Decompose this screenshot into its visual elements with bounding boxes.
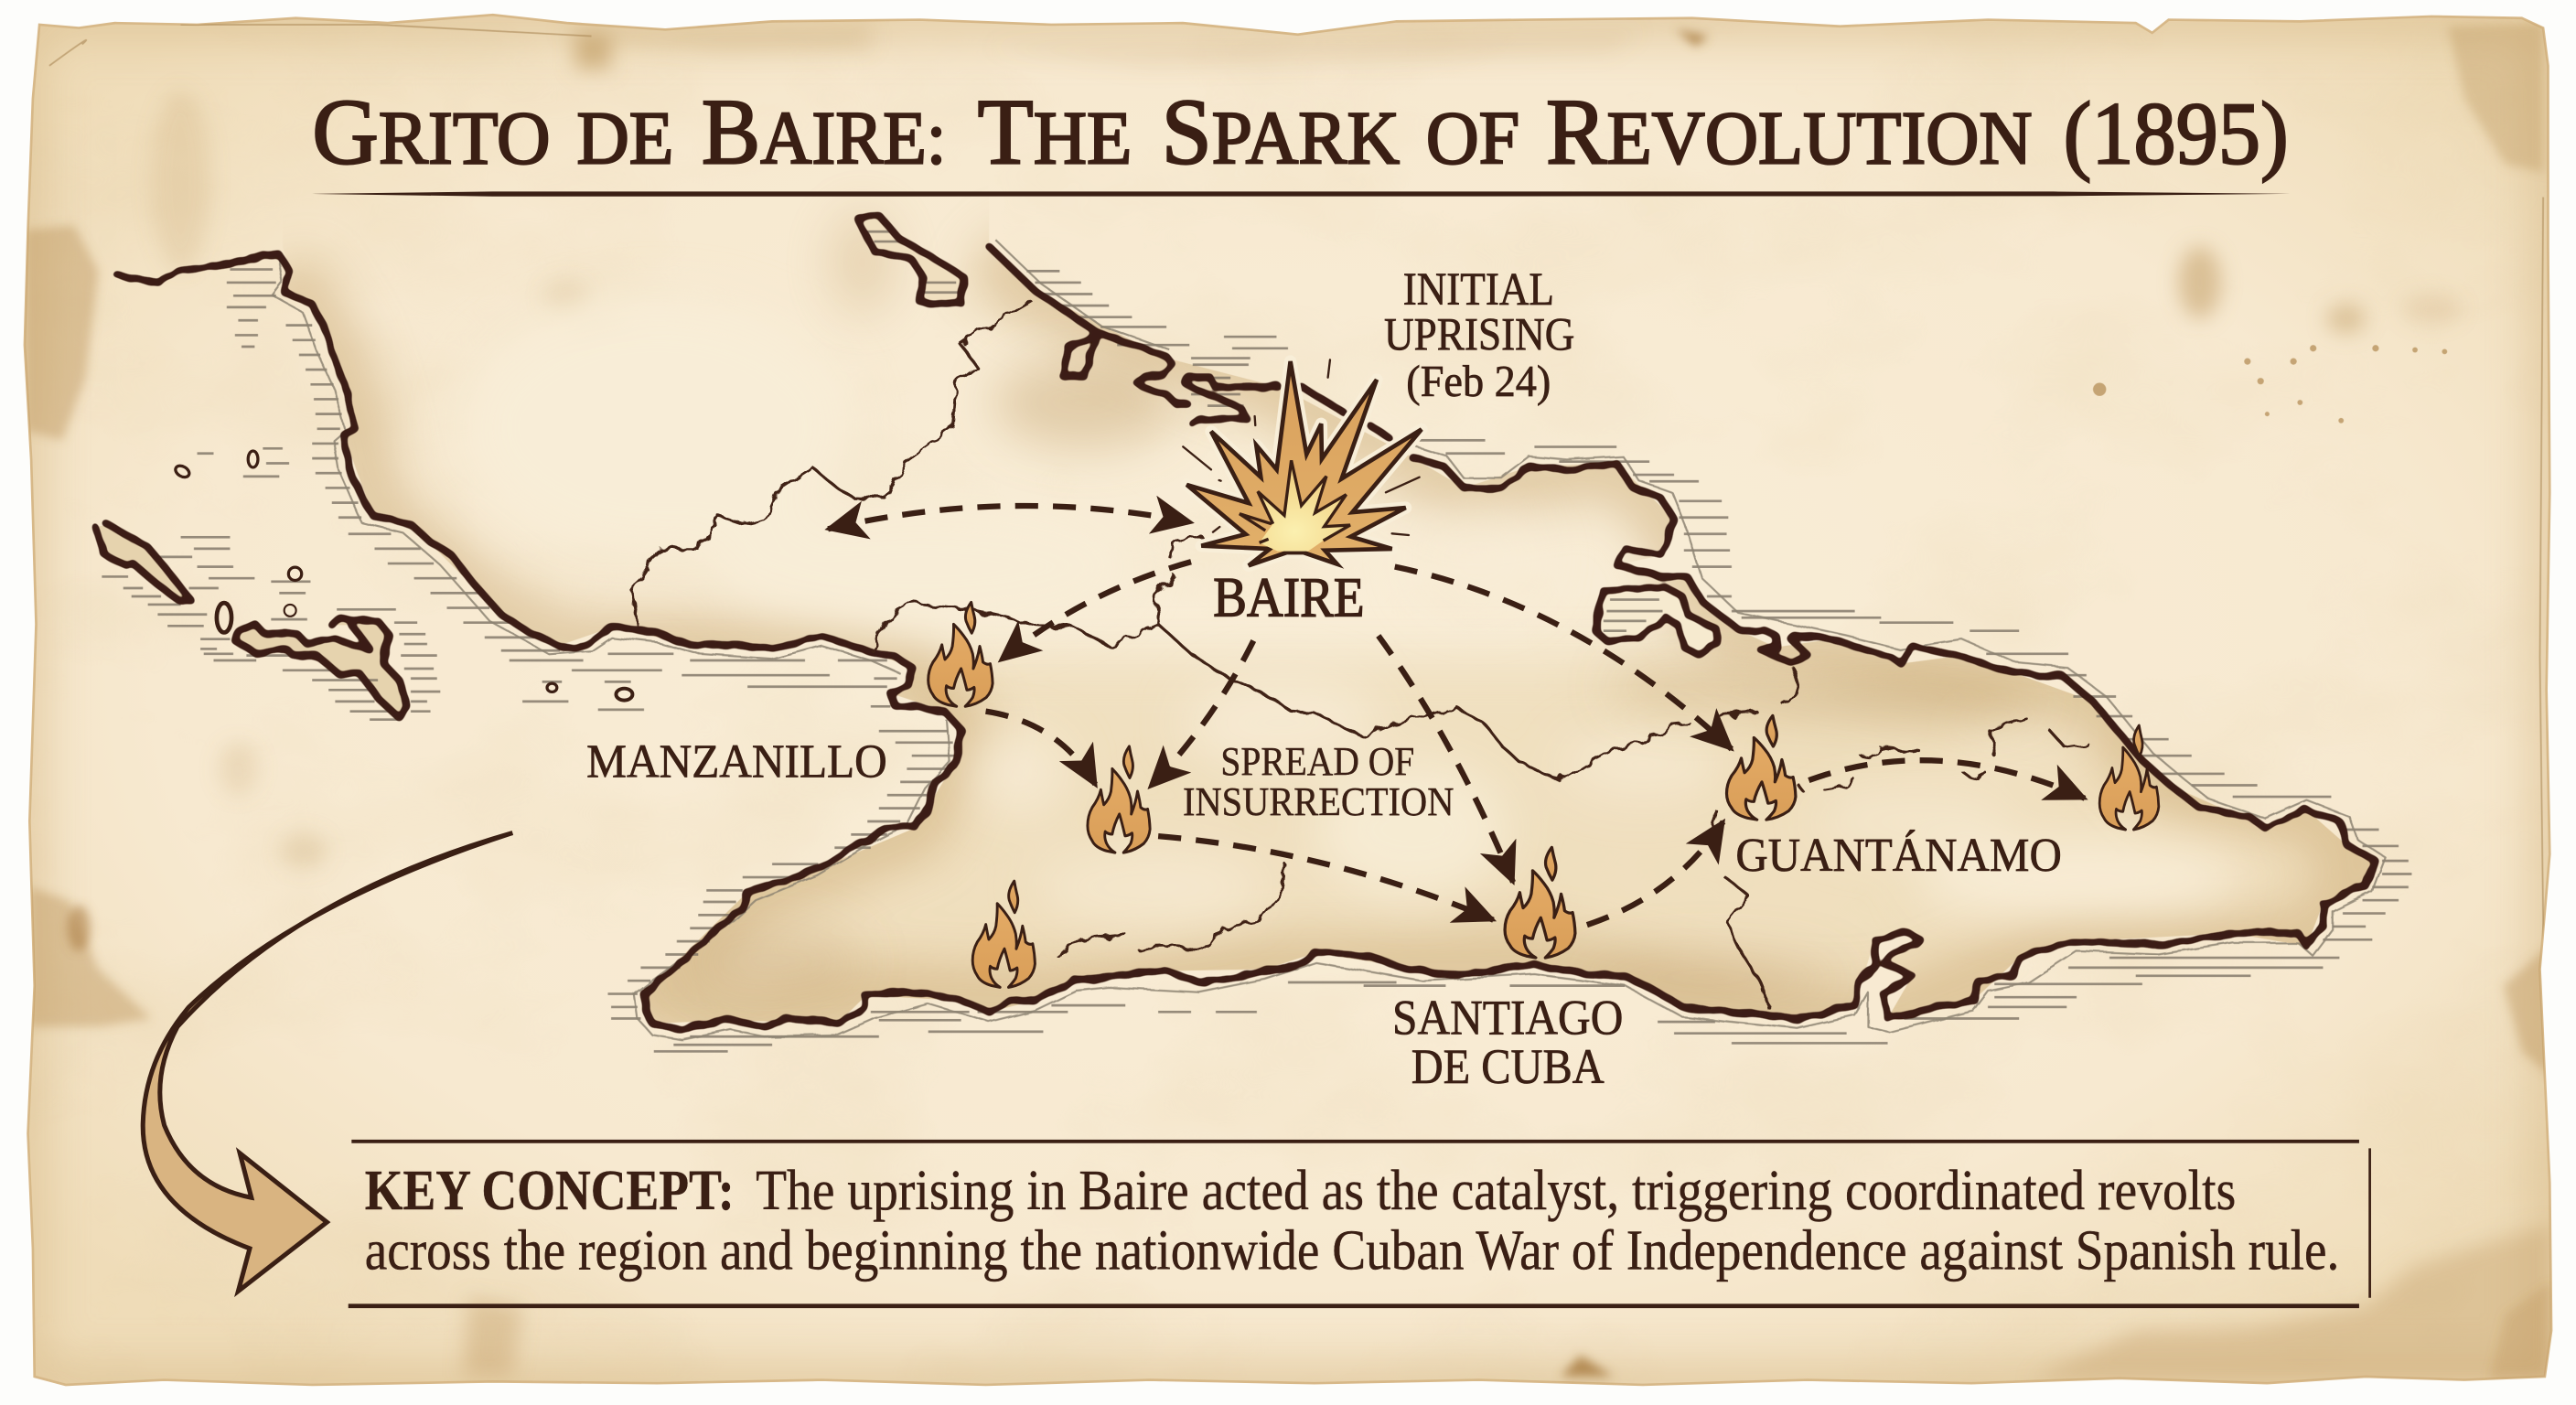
northern peninsula (857, 215, 964, 304)
map: offset grey shorelines (273, 240, 2386, 1040)
label: Santiago de Cuba: DE CUBA (1411, 1039, 1605, 1094)
map: peninsula, lagoon and island fills (95, 210, 1717, 718)
arrow: Guantanamo to east (1809, 760, 2085, 799)
arrow: Baire to Guantanamo (1395, 567, 1732, 749)
heading: title: (1895) (2064, 85, 2289, 183)
icon: explosion at Baire (1183, 359, 1422, 565)
icon: flame near Manzanillo (928, 602, 993, 706)
spatter (2093, 345, 2447, 424)
map: land washes (283, 246, 2431, 1051)
label: initial uprising: (Feb 24) (1406, 358, 1551, 406)
bay (1597, 586, 1717, 656)
heading: title: GRITO (312, 81, 553, 185)
heading: title: SPARK (1162, 81, 1406, 185)
icon: flame east (2099, 725, 2159, 830)
heading: title: THE (978, 81, 1134, 185)
icon: flame Guantanamo (1727, 715, 1796, 820)
arrow: Manzanillo to central fire (986, 712, 1096, 785)
map: small islands (174, 451, 632, 701)
map: rivers (632, 301, 2088, 1007)
key concept text: across the region and beginning the nationwide Cuban War of Independence against Spanish rule. (365, 1218, 2339, 1282)
western islands (95, 524, 190, 601)
panel: key concept (349, 1142, 2370, 1306)
icon: flame south-west (972, 881, 1035, 987)
heading: title: OF (1426, 96, 1519, 180)
label: Manzanillo: MANZANILLO (586, 735, 887, 788)
north coast (989, 246, 1187, 404)
arrow: Baire to Santiago (1379, 636, 1513, 882)
heading: title: BAIRE: (702, 81, 958, 185)
label: Guantanamo: GUANTÁNAMO (1735, 829, 2062, 882)
arrow: central fire to Santiago (1158, 836, 1493, 920)
map: coastlines (95, 215, 2376, 1030)
key concept text: The uprising in Baire acted as the catalyst, triggering coordinated revolts (756, 1158, 2236, 1222)
arrow: double-headed east-west spread (828, 506, 1191, 529)
label: spread of insurrection: SPREAD OF (1220, 738, 1414, 784)
torn-edge lines (48, 24, 2545, 937)
icon: flame Santiago de Cuba (1505, 847, 1575, 958)
main coast (115, 254, 2376, 1030)
label: Baire: BAIRE (1213, 567, 1365, 628)
label: initial uprising: UPRISING (1384, 309, 1574, 360)
icon: flame central (1088, 746, 1150, 853)
arrow: Baire to Manzanillo (1001, 562, 1191, 660)
map: sea hatching (102, 231, 2411, 1051)
key concept text: KEY CONCEPT: (365, 1158, 735, 1222)
arrow: curved pointer to key concept (143, 833, 512, 1292)
label: Santiago de Cuba: SANTIAGO (1392, 990, 1623, 1045)
heading: title: DE (576, 96, 673, 180)
label: spread of insurrection: INSURRECTION (1183, 778, 1454, 824)
arrow: Baire to central fire (1150, 640, 1253, 787)
label: initial uprising: INITIAL (1403, 263, 1554, 315)
heading: title: REVOLUTION (1546, 81, 2044, 185)
title rule (312, 191, 2291, 197)
arrow: Santiago to Guantanamo (1587, 821, 1723, 925)
